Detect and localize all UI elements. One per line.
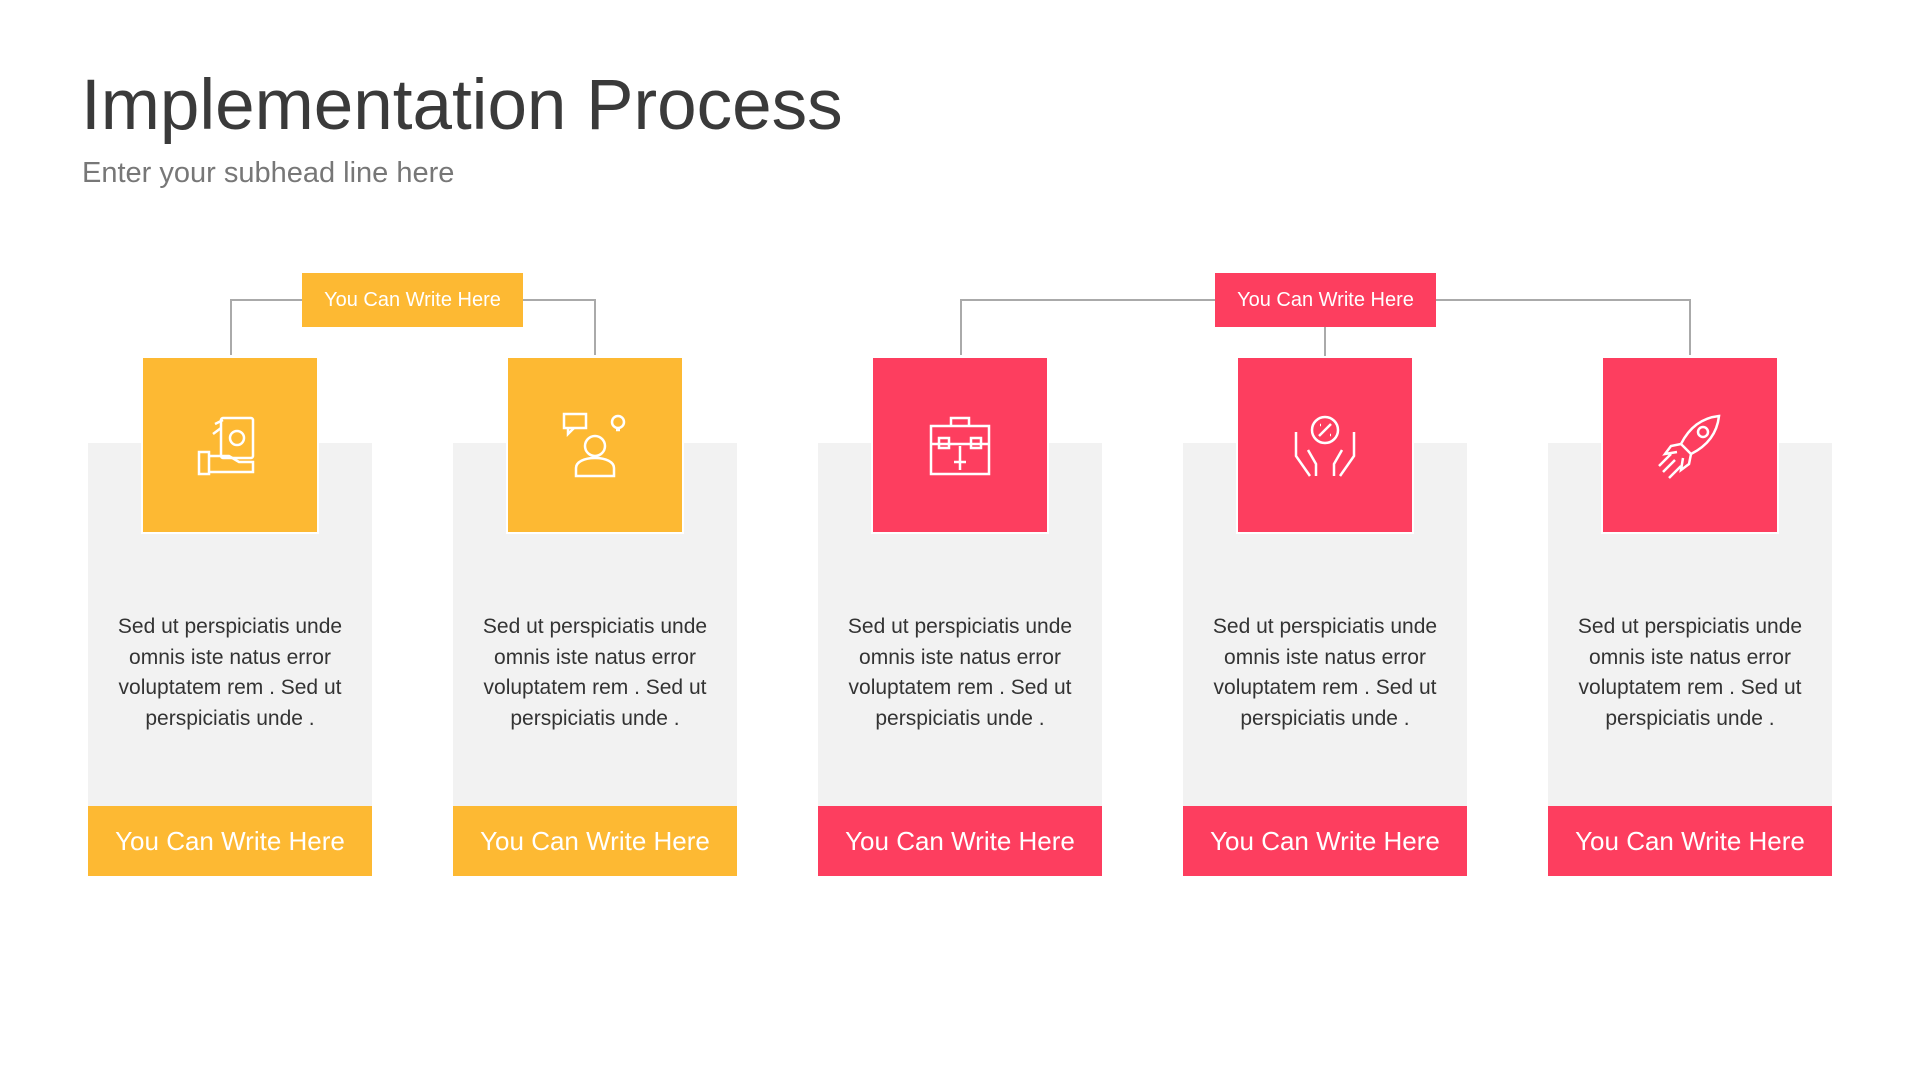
text (1578, 615, 1802, 730)
footer (453, 806, 737, 876)
text: omnis iste natus error (1589, 646, 1791, 668)
card 4 (1183, 443, 1467, 876)
label: yellow group (302, 273, 523, 327)
text: voluptatem rem . Sed ut (119, 676, 341, 699)
text: omnis iste natus error (494, 646, 696, 668)
text: Sed ut perspiciatis unde (1213, 615, 1437, 638)
card 3 (818, 443, 1102, 876)
label: pink group: You Can Write Here (1237, 289, 1414, 311)
footer: You Can Write Here (115, 826, 345, 856)
footer (88, 806, 372, 876)
text: voluptatem rem . Sed ut (849, 676, 1071, 699)
icon: rocket (1603, 358, 1777, 532)
text: voluptatem rem . Sed ut (1579, 676, 1801, 699)
footer: You Can Write Here (480, 826, 710, 856)
footer: You Can Write Here (845, 826, 1075, 856)
text: perspiciatis unde . (145, 706, 315, 730)
card 2 (453, 443, 737, 876)
text: perspiciatis unde . (875, 706, 1045, 730)
label: pink group (1215, 273, 1436, 327)
text: Sed ut perspiciatis unde (483, 615, 707, 638)
icon: toolbox (873, 358, 1047, 532)
icon: person idea (508, 358, 682, 532)
card 5 (1548, 443, 1832, 876)
text (1213, 615, 1437, 730)
title: Implementation Process (81, 66, 843, 145)
text: perspiciatis unde . (1240, 706, 1410, 730)
text: perspiciatis unde . (1605, 706, 1775, 730)
text (118, 615, 342, 730)
text: perspiciatis unde . (510, 706, 680, 730)
text: Sed ut perspiciatis unde (1578, 615, 1802, 638)
footer (1183, 806, 1467, 876)
card 1 (88, 443, 372, 876)
text: omnis iste natus error (859, 646, 1061, 668)
footer (1548, 806, 1832, 876)
text: voluptatem rem . Sed ut (484, 676, 706, 699)
footer: You Can Write Here (1210, 826, 1440, 856)
text (848, 615, 1072, 730)
subhead: Enter your subhead line here (82, 157, 454, 189)
text: omnis iste natus error (1224, 646, 1426, 668)
icon: hands percent (1238, 358, 1412, 532)
footer (818, 806, 1102, 876)
text: Sed ut perspiciatis unde (848, 615, 1072, 638)
text: omnis iste natus error (129, 646, 331, 668)
text (483, 615, 707, 730)
connector lines (230, 299, 1691, 356)
label: yellow group: You Can Write Here (324, 289, 501, 311)
text: voluptatem rem . Sed ut (1214, 676, 1436, 699)
footer: You Can Write Here (1575, 826, 1805, 856)
text: Sed ut perspiciatis unde (118, 615, 342, 638)
icon: money hand (143, 358, 317, 532)
